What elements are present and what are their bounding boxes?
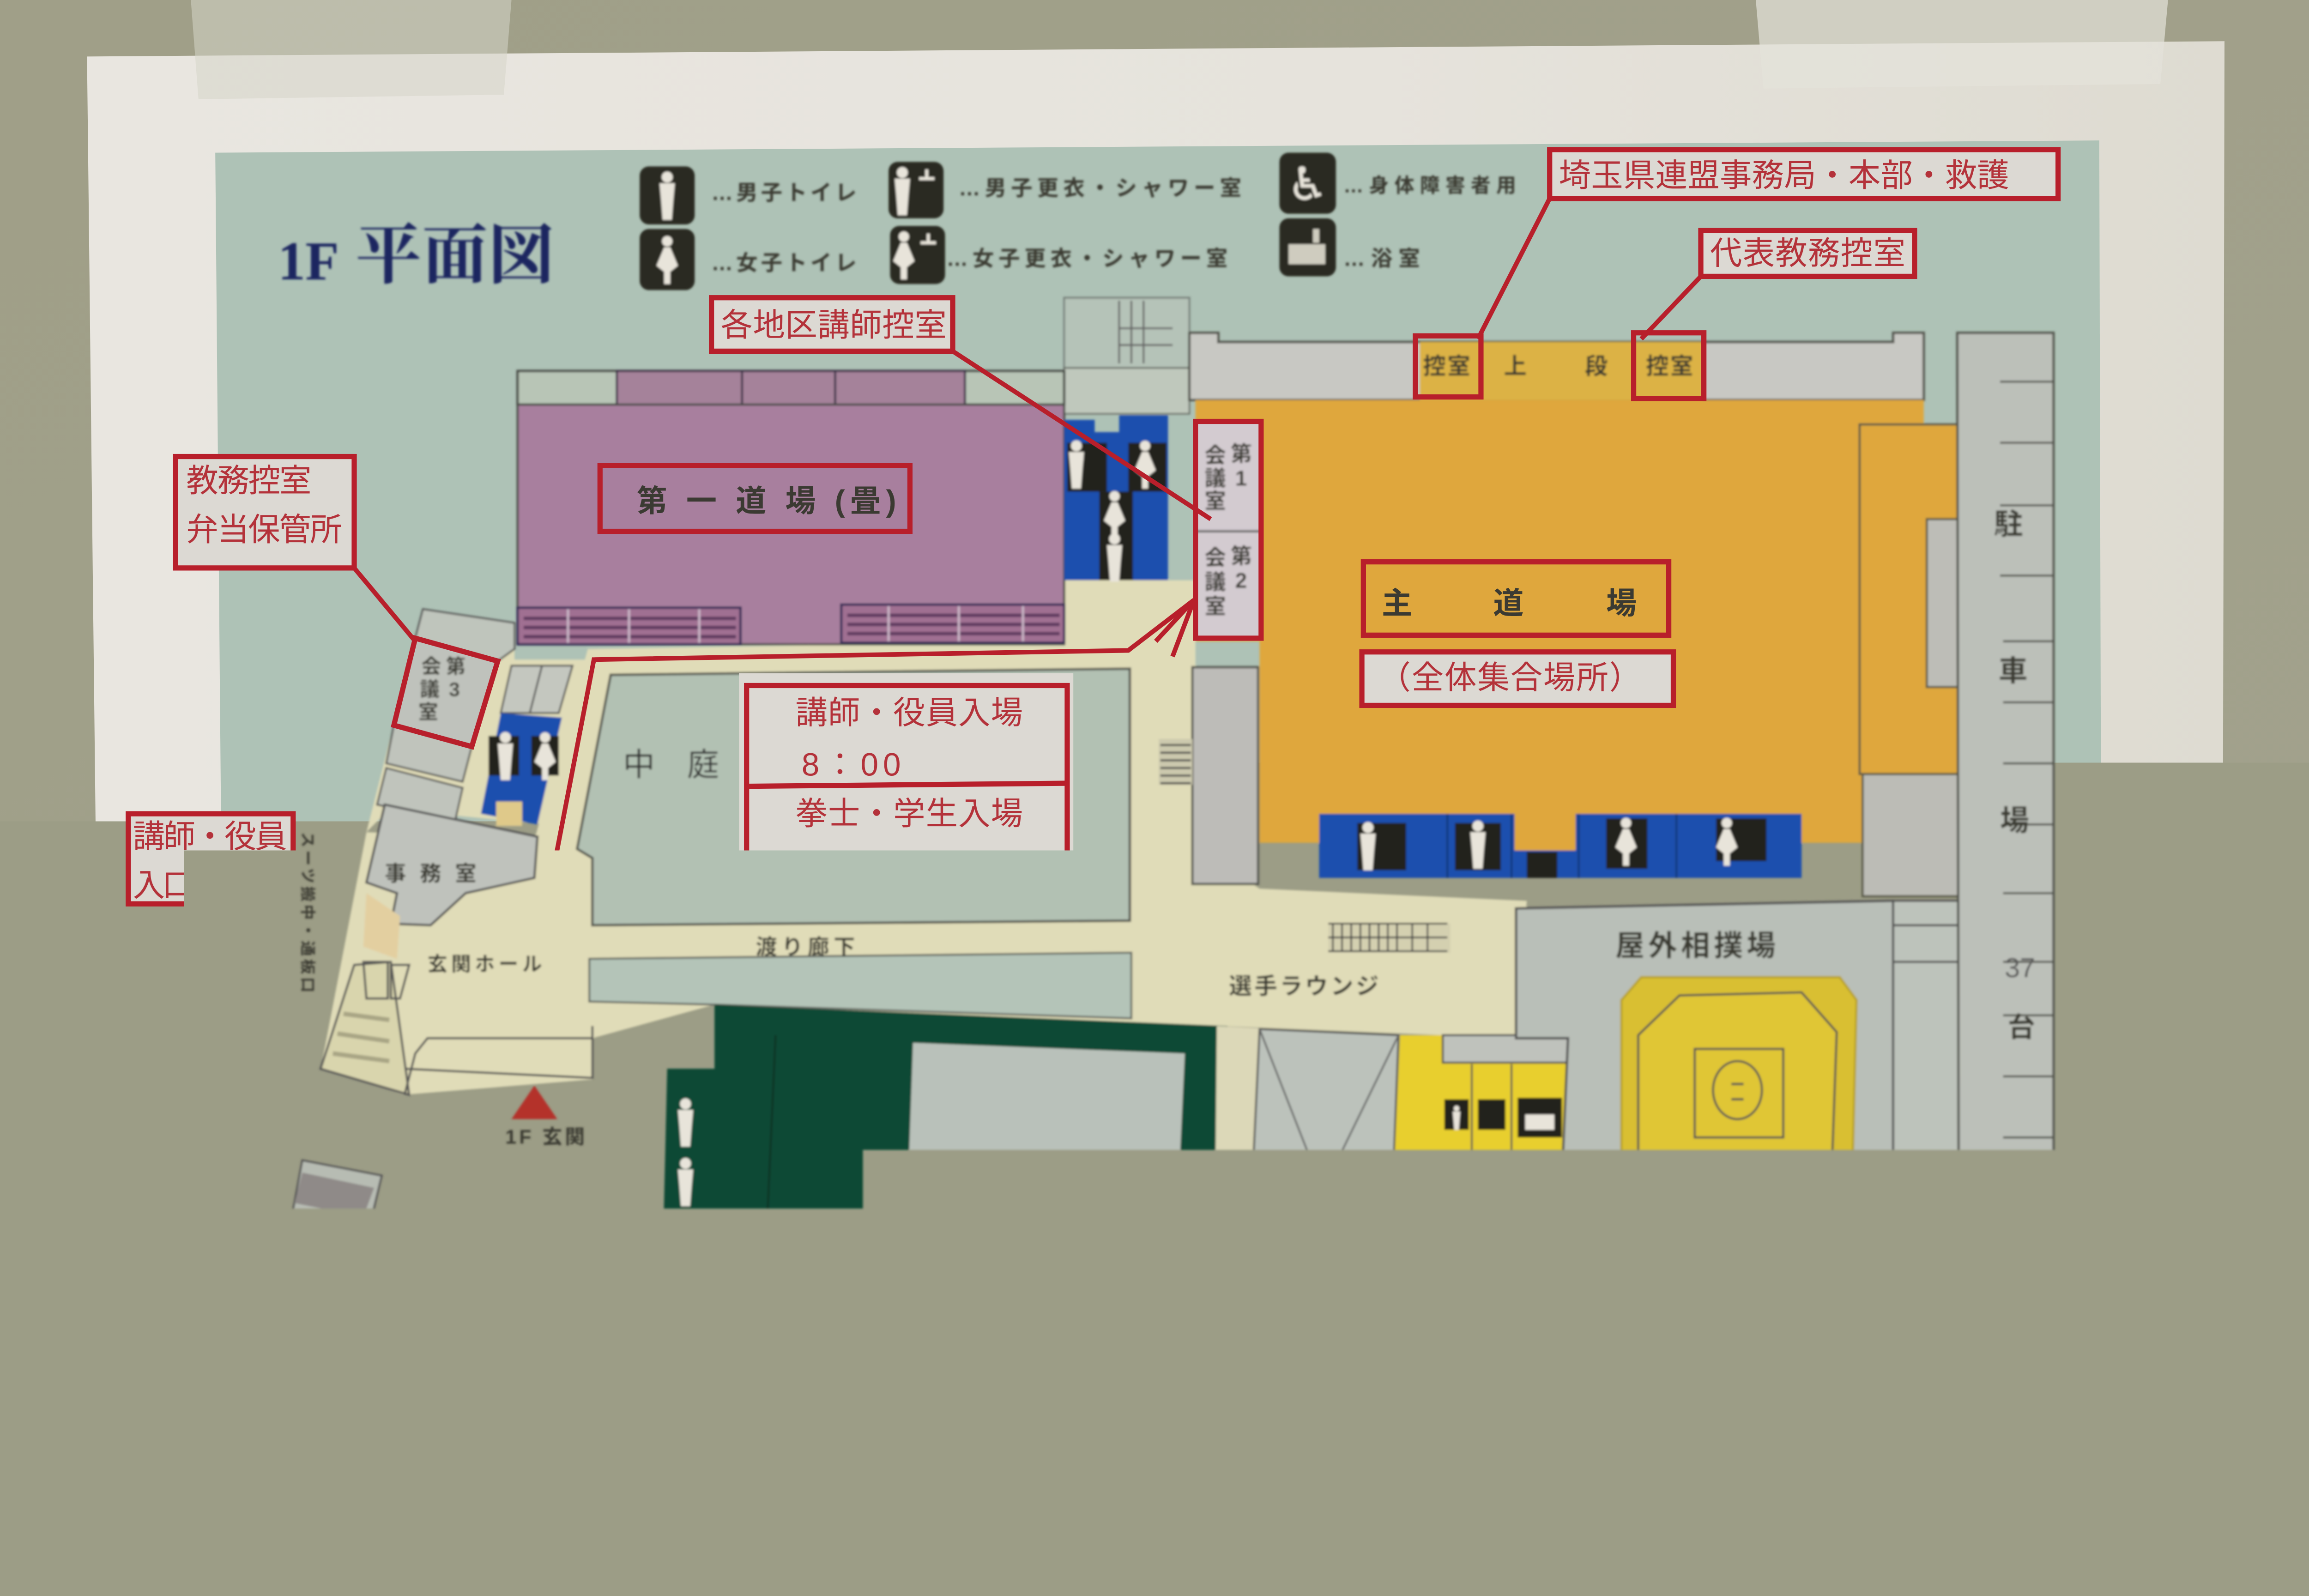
- callout: women's changing room: 女子更衣室: [1218, 1398, 1380, 1434]
- main dojo toilets: [1319, 809, 1801, 878]
- callout: 2F entrance left: [234, 1300, 469, 1392]
- office room: 事務室: [385, 862, 477, 886]
- red box: conference rooms 1-2: [1196, 421, 1261, 638]
- stage labels: 控室: [1423, 353, 1470, 379]
- side corridor: [1893, 901, 1960, 1237]
- panel: entry times: [739, 673, 1073, 912]
- callout: instructor waiting room: [712, 298, 1211, 519]
- panel: archery dojo: [661, 1004, 1227, 1350]
- panel: indoor sumo: 屋内相撲場: [1386, 1315, 1550, 1347]
- caption: 武道館 1階 平面図: [252, 1416, 602, 1459]
- label: walkway: 渡り廊下: [756, 935, 855, 959]
- callout: instructor waiting room: 各地区講師控室: [720, 307, 947, 343]
- panel: indoor sumo: [1386, 1035, 1568, 1356]
- gray storage room: [1192, 667, 1258, 884]
- courtyard: [577, 669, 1130, 925]
- room labels: [1205, 441, 1252, 618]
- arrow: route to conference room: [394, 600, 1194, 942]
- callout: 2F entrance right: [1744, 1272, 2000, 1368]
- callout: representative staff room: [1641, 230, 1915, 339]
- title: 1F: [278, 230, 339, 291]
- first dojo toilets: [1064, 415, 1168, 582]
- callout: representative staff room: 代表教務控室: [1710, 235, 1905, 271]
- panel: outdoor sumo: 屋外相撲場: [1615, 930, 1776, 962]
- room 3 label: 第: [446, 656, 465, 678]
- label: assembly place: [1362, 652, 1674, 705]
- entrance hall details: 玄関ホール: [428, 954, 542, 976]
- crossed-out void: [1214, 1026, 1398, 1353]
- room labels: 第: [1231, 441, 1252, 466]
- callout: staff room and lunch storage: 教務控室: [186, 463, 311, 499]
- map background: [215, 140, 2103, 1392]
- stairs by main dojo: [1159, 739, 1192, 785]
- icon: accessible: [1280, 153, 1336, 214]
- panel: parking: 駐: [1994, 508, 2023, 541]
- icon: men's changing: [889, 162, 943, 218]
- callout: 2F entrance left: 2F玄関へ: [240, 1306, 369, 1342]
- red box: waiting room B: [1634, 333, 1704, 399]
- callout: staff room and lunch storage: 弁当保管所: [186, 511, 342, 547]
- label: players lounge: 選手ラウンジ: [1229, 973, 1378, 999]
- legend text: …女子トイレ: [712, 251, 857, 275]
- arrow: 2F entrance right: [1902, 1108, 1950, 1260]
- icon: women's changing: [890, 226, 945, 284]
- room labels: 会: [1205, 545, 1226, 569]
- label: 1F entrance: 1F 玄関: [505, 1126, 585, 1148]
- callout: 2F entrance left: 拳士・学生入口: [240, 1353, 458, 1389]
- bleachers right: [841, 605, 1064, 643]
- room labels: 会: [1205, 443, 1226, 467]
- legend: [640, 153, 1516, 290]
- callout: women's changing room: [1200, 1167, 1469, 1440]
- panel: parking: 37: [2005, 952, 2035, 983]
- room labels: 第: [1231, 544, 1252, 568]
- callout: instructor entrance: [128, 814, 293, 904]
- panel: parking: 場: [2000, 805, 2029, 837]
- icon: entrance triangle: [512, 1086, 557, 1119]
- panel: entry times: 8：00: [802, 747, 901, 783]
- bleachers left: [518, 608, 740, 644]
- left wing rooms: [366, 609, 588, 832]
- callout: Saitama federation: 埼玉県連盟事務局・本部・救護: [1559, 157, 2009, 193]
- panel: parking: 車: [1999, 655, 2028, 688]
- red box: waiting room A: [1415, 336, 1481, 397]
- stage labels: 段: [1585, 353, 1608, 379]
- office room: [366, 804, 538, 925]
- main dojo stage upper: [1189, 333, 1924, 400]
- stage labels: [1423, 353, 1693, 379]
- red box: first dojo: [600, 466, 910, 532]
- callout: instructor entrance: 入口: [133, 867, 194, 903]
- icon: bath: [1280, 218, 1336, 276]
- panel: parking: [1957, 333, 2054, 1341]
- legend text: …男子更衣・シャワー室: [959, 176, 1241, 200]
- panel: entry times: 講師・役員入場: [795, 695, 1023, 731]
- room labels: 1: [1235, 466, 1247, 490]
- entrance hall details: [320, 893, 592, 1094]
- legend text: …男子トイレ: [712, 181, 857, 205]
- red box: main dojo: 道: [1493, 586, 1524, 621]
- panel: main dojo floor: [1196, 400, 1960, 896]
- icon: accessible: ♿: [1287, 158, 1328, 211]
- passage strip: [589, 953, 1131, 1018]
- courtyard: 中: [623, 747, 655, 783]
- red box: main dojo: 主: [1382, 586, 1412, 621]
- icon: women's toilet: [640, 229, 695, 290]
- room labels: 2: [1235, 568, 1247, 592]
- room labels: 室: [1205, 594, 1226, 618]
- red box: conference room 3: [394, 638, 498, 747]
- panel: entry times: 拳士・学生入場: [795, 795, 1023, 831]
- room 3 label: [418, 656, 465, 724]
- legend text: [712, 175, 1516, 275]
- red box: main dojo: 場: [1606, 586, 1637, 621]
- room labels: 議: [1205, 466, 1226, 490]
- red box: women's changing room: [1438, 1063, 1566, 1167]
- sumo ring: [1621, 977, 1856, 1211]
- panel: archery dojo: 場: [1076, 1164, 1107, 1198]
- panel: archery dojo: 道: [1011, 1164, 1041, 1198]
- room 3 label: 室: [418, 701, 438, 724]
- cream corridor floor: [320, 580, 1527, 1094]
- room 3 label: 3: [449, 679, 460, 701]
- stairs in lounge: [1328, 924, 1451, 953]
- side entrance text: スーツ搬中・通板口: [299, 832, 316, 992]
- title: 平面図: [356, 219, 554, 292]
- lower-left stair block: [281, 1161, 382, 1290]
- callout: staff room and lunch storage: [175, 457, 415, 641]
- courtyard: 庭: [687, 747, 719, 783]
- north stair block: [1064, 298, 1189, 414]
- panel: first dojo: [518, 371, 1064, 644]
- panel: archery dojo: 弓: [942, 1164, 973, 1198]
- callout: instructor entrance: 講師・役員: [133, 818, 287, 854]
- panel: entry times: 8：45: [795, 846, 889, 882]
- room labels: 室: [1205, 489, 1226, 513]
- stage labels: 控室: [1646, 353, 1693, 379]
- conference rooms 1 and 2: [1196, 421, 1261, 638]
- callout: 2F entrance right: 2F玄関へ: [1751, 1281, 1886, 1317]
- printed plan drawing: [278, 153, 2054, 1356]
- room 3 label: 議: [420, 679, 440, 701]
- legend text: …身体障害者用: [1343, 175, 1516, 197]
- label: assembly place: （全体集合場所）: [1378, 659, 1641, 695]
- callout: 2F entrance right: 拳士・学生入口: [1751, 1321, 1974, 1357]
- room 3 label: 会: [421, 656, 441, 678]
- panel: outdoor sumo: [1516, 901, 1893, 1252]
- red box: main dojo: [1363, 562, 1669, 635]
- panel: parking: 台: [2008, 1012, 2035, 1043]
- icon: men's toilet: [640, 166, 695, 224]
- stage labels: 上: [1504, 353, 1527, 379]
- arrow: instructor entrance: [278, 892, 371, 925]
- callout: Saitama federation: [1478, 150, 2058, 339]
- red box: first dojo: 第 一 道 場 (畳): [637, 484, 896, 519]
- legend text: …浴室: [1343, 246, 1420, 270]
- arrow: 2F entrance left: [314, 1168, 356, 1298]
- legend text: …女子更衣・シャワー室: [947, 246, 1227, 270]
- room labels: 議: [1205, 570, 1226, 594]
- floor plan print: [215, 140, 2103, 1392]
